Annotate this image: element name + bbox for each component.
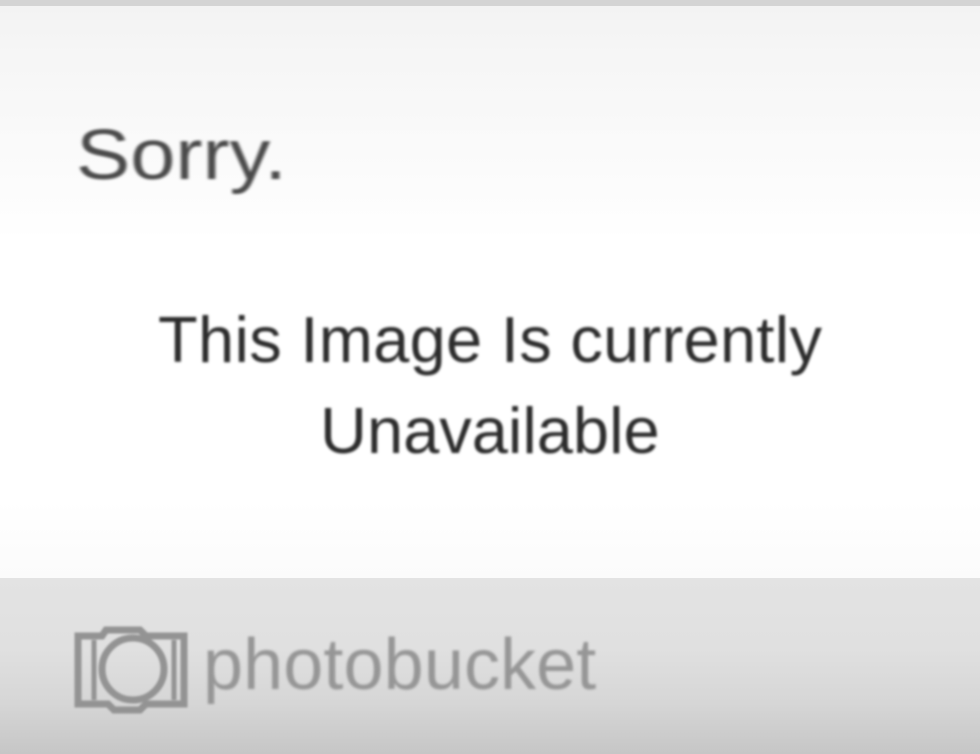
message line 1: This Image Is currently bbox=[158, 303, 822, 376]
top edge band bbox=[0, 0, 980, 6]
message line 2: Unavailable bbox=[320, 394, 660, 467]
icon: photobucket camera bbox=[73, 625, 189, 715]
brand wordmark: photobucket bbox=[203, 625, 596, 705]
heading: Sorry.: Sorry. bbox=[76, 116, 287, 195]
footer band bbox=[0, 578, 980, 754]
